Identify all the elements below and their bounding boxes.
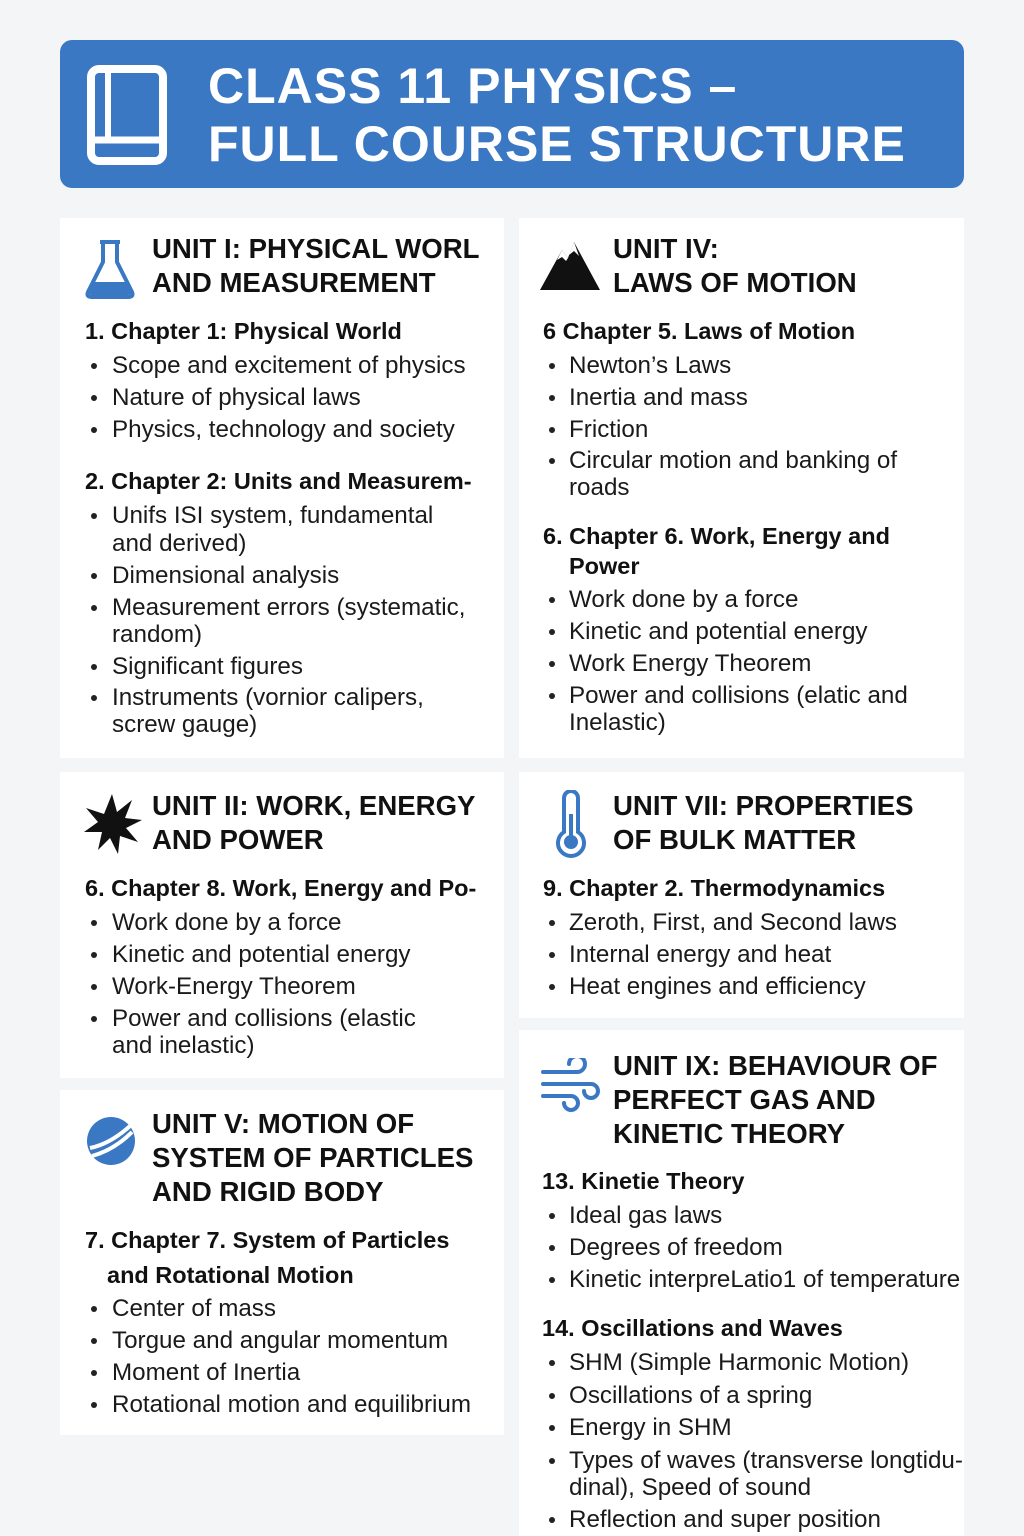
panel: unit IX: dinal), Speed of sound bbox=[569, 1474, 811, 1501]
panel: unit VII: Heat engines and efficiency bbox=[569, 973, 866, 1000]
panel: unit V: Rotational motion and equilibrium bbox=[112, 1391, 471, 1418]
panel: unit VII: 9. Chapter 2. Thermodynamics bbox=[543, 875, 885, 901]
panel: unit V: SYSTEM OF PARTICLES bbox=[152, 1142, 473, 1173]
panel: unit IV: LAWS OF MOTION bbox=[613, 267, 857, 298]
panel: unit IV: Power bbox=[569, 553, 640, 579]
panel: unit V bbox=[60, 1090, 504, 1435]
panel: unit IV: Work Energy Theorem bbox=[569, 650, 811, 677]
panel: unit II: Power and collisions (elastic bbox=[112, 1005, 416, 1032]
panel: unit VII bbox=[519, 772, 964, 1018]
panel: unit IX: Types of waves (transverse longtidu- bbox=[569, 1447, 963, 1474]
panel: unit VII: UNIT VII: PROPERTIES bbox=[613, 790, 914, 821]
panel: unit IX: Kinetic interpreLatio1 of temperature bbox=[569, 1266, 960, 1293]
panel: unit I: Scope and excitement of physics bbox=[112, 352, 466, 379]
panel: unit IV: Power and collisions (elatic and bbox=[569, 682, 908, 709]
panel: unit IV: Newton’s Laws bbox=[569, 352, 731, 379]
title: CLASS 11 PHYSICS – bbox=[208, 58, 737, 114]
panel: unit I: screw gauge) bbox=[112, 711, 257, 738]
panel: unit IX: Degrees of freedom bbox=[569, 1234, 783, 1261]
panel: unit V: 7. Chapter 7. System of Particles bbox=[85, 1227, 449, 1253]
panel: unit IV: Inertia and mass bbox=[569, 384, 748, 411]
icon: wind bbox=[541, 1058, 600, 1112]
panel: unit IX: Ideal gas laws bbox=[569, 1202, 722, 1229]
panel: unit I: and derived) bbox=[112, 530, 246, 557]
panel: unit V: and Rotational Motion bbox=[107, 1262, 354, 1288]
panel: unit I: Dimensional analysis bbox=[112, 562, 339, 589]
panel: unit V: Moment of Inertia bbox=[112, 1359, 300, 1386]
panel: unit I: UNIT I: PHYSICAL WORL bbox=[152, 233, 480, 264]
panel: unit IX: 14. Oscillations and Waves bbox=[542, 1315, 843, 1341]
icon: starburst bbox=[84, 794, 142, 854]
title: FULL COURSE STRUCTURE bbox=[208, 116, 906, 172]
panel: unit II: and inelastic) bbox=[112, 1032, 255, 1059]
panel: unit V: Torgue and angular momentum bbox=[112, 1327, 448, 1354]
panel: unit IV: Inelastic) bbox=[569, 709, 666, 736]
panel: unit IX: Reflection and super position bbox=[569, 1506, 881, 1533]
panel: unit V: UNIT V: MOTION OF bbox=[152, 1108, 414, 1139]
panel: unit II bbox=[60, 772, 504, 1078]
panel: unit IX: UNIT IX: BEHAVIOUR OF bbox=[613, 1050, 937, 1081]
title bbox=[208, 58, 906, 172]
icon: mountain bbox=[540, 242, 600, 290]
panel: unit V: AND RIGID BODY bbox=[152, 1176, 384, 1207]
panel: unit IV: roads bbox=[569, 474, 630, 501]
panel: unit I: Nature of physical laws bbox=[112, 384, 361, 411]
panel: unit II: 6. Chapter 8. Work, Energy and Po- bbox=[85, 875, 476, 901]
panel: unit IV: 6. Chapter 6. Work, Energy and bbox=[543, 523, 890, 549]
panel: unit IV: Friction bbox=[569, 416, 648, 443]
panel: unit IV: Work done by a force bbox=[569, 586, 798, 613]
panel: unit IX: Energy in SHM bbox=[569, 1414, 732, 1441]
panel: unit IV bbox=[519, 218, 964, 758]
panel: unit I: random) bbox=[112, 621, 202, 648]
panel: unit I: AND MEASUREMENT bbox=[152, 267, 436, 298]
panel: unit IX bbox=[519, 1030, 964, 1536]
panel: unit IV: UNIT IV: bbox=[613, 233, 719, 264]
panel: unit I: 1. Chapter 1: Physical World bbox=[85, 318, 402, 344]
panel: unit IX: PERFECT GAS AND bbox=[613, 1084, 876, 1115]
header banner bbox=[60, 40, 964, 188]
panel: unit II: Work-Energy Theorem bbox=[112, 973, 356, 1000]
panel: unit I: Physics, technology and society bbox=[112, 416, 455, 443]
panel: unit I: Unifs ISI system, fundamental bbox=[112, 502, 433, 529]
panel: unit VII: OF BULK MATTER bbox=[613, 824, 856, 855]
icon: thermometer bbox=[556, 790, 586, 858]
panel: unit IV: Kinetic and potential energy bbox=[569, 618, 868, 645]
panel: unit IX: 13. Kinetie Theory bbox=[542, 1168, 744, 1194]
panel: unit V: Center of mass bbox=[112, 1295, 276, 1322]
icon: book bbox=[87, 65, 167, 165]
panel: unit II: Work done by a force bbox=[112, 909, 341, 936]
panel: unit IX: SHM (Simple Harmonic Motion) bbox=[569, 1349, 909, 1376]
panel: unit IV: Circular motion and banking of bbox=[569, 447, 897, 474]
icon: planet bbox=[87, 1117, 135, 1165]
panel: unit VII: Zeroth, First, and Second laws bbox=[569, 909, 897, 936]
panel: unit VII: Internal energy and heat bbox=[569, 941, 831, 968]
panel: unit II: UNIT II: WORK, ENERGY bbox=[152, 790, 475, 821]
panel: unit II: Kinetic and potential energy bbox=[112, 941, 411, 968]
panel: unit IX: Oscillations of a spring bbox=[569, 1382, 812, 1409]
icon: flask bbox=[86, 240, 134, 299]
panel: unit I: 2. Chapter 2: Units and Measurem- bbox=[85, 468, 472, 494]
panel: unit I: Instruments (vornior calipers, bbox=[112, 684, 424, 711]
panel: unit I: Measurement errors (systematic, bbox=[112, 594, 466, 621]
panel: unit I bbox=[60, 218, 504, 758]
panel: unit I: Significant figures bbox=[112, 653, 303, 680]
panel: unit IX: KINETIC THEORY bbox=[613, 1118, 845, 1149]
panel: unit II: AND POWER bbox=[152, 824, 324, 855]
panel: unit IV: 6 Chapter 5. Laws of Motion bbox=[543, 318, 855, 344]
